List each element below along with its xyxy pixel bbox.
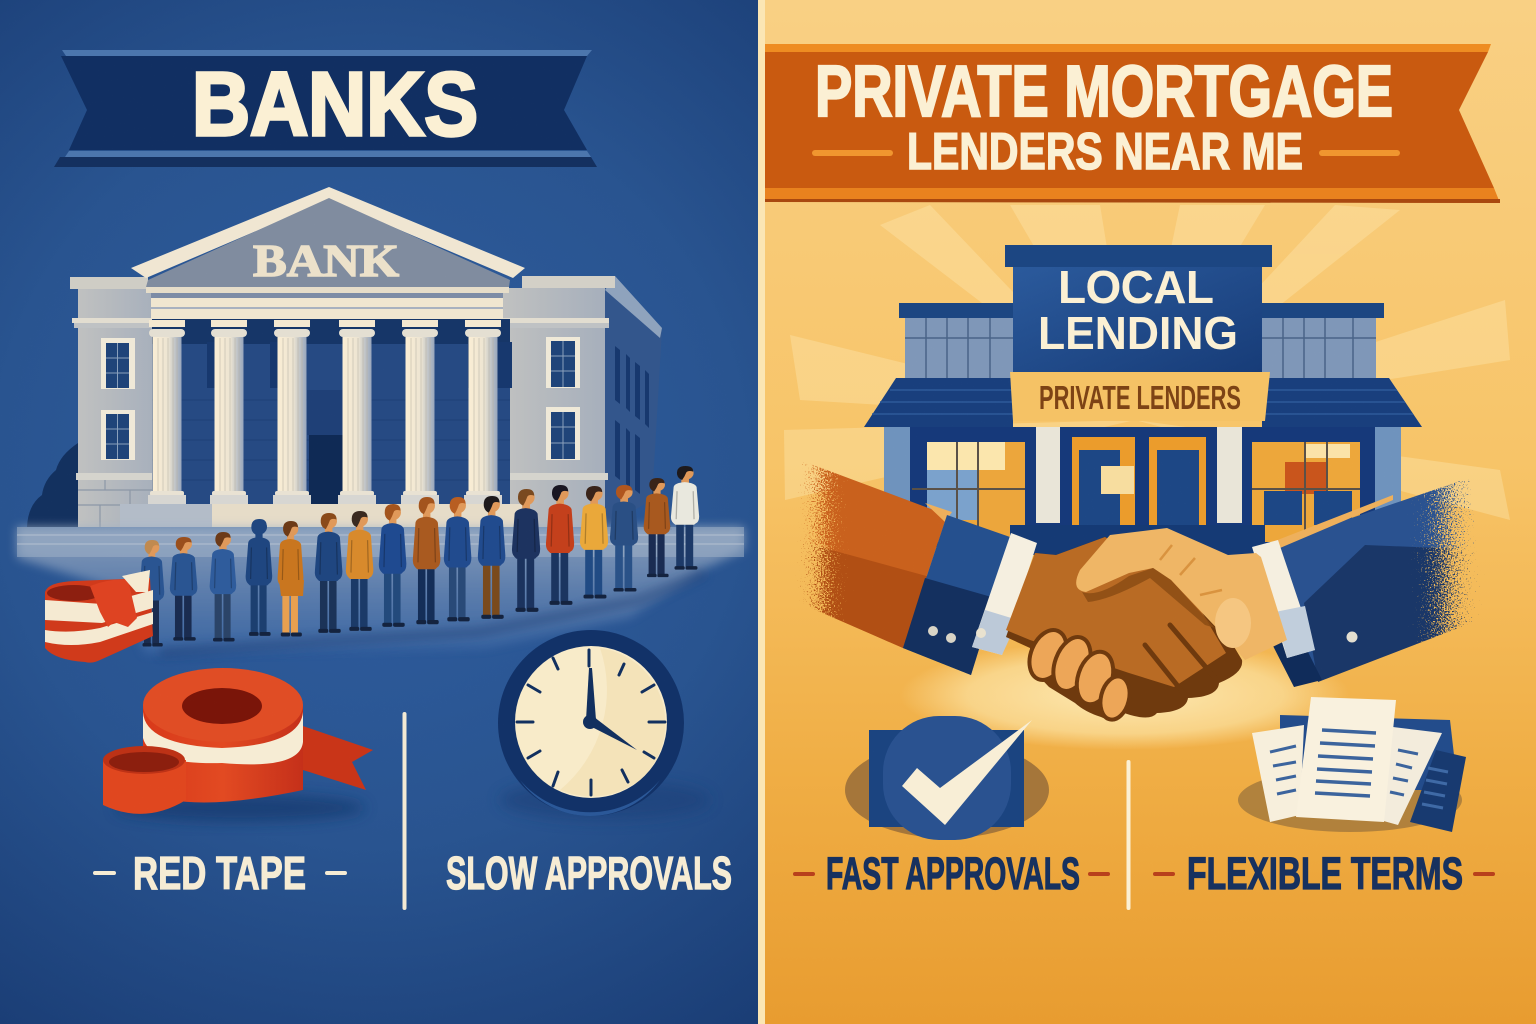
person 5 [278,521,304,636]
left shirt cuff [972,533,1037,655]
person 16 [644,478,670,577]
queue of people [139,466,699,647]
side wall [605,276,662,527]
entablature [151,298,503,319]
left cuff [903,515,1010,675]
lower storefront [884,427,1401,547]
illustration: bank building [27,187,672,530]
pediment label: BANK [253,235,399,286]
center page [1296,697,1396,822]
left wing [78,289,158,527]
illustration: local lending storefront [864,245,1422,555]
person 8 [379,504,406,627]
pediment [131,187,525,278]
tan hand [1076,528,1287,660]
illustration: handshake [793,460,1487,723]
wing windows [101,337,580,460]
sign [1013,267,1262,372]
brown hand [1006,537,1226,687]
label: fast approvals [793,848,1110,899]
person 15 [610,485,638,592]
person 13 [546,485,574,605]
ribbon tail [300,725,373,790]
person 11 [478,496,505,619]
person 7 [346,511,373,631]
roll body [143,705,303,802]
roll hole [182,688,262,724]
panel: banks background [0,0,760,1024]
icon: red tape bundle at queue start [45,570,153,663]
entrance door [309,435,344,505]
check mark [902,720,1032,825]
person 10 [444,497,471,621]
roll top [143,668,303,742]
heading: lenders near me: LENDERS NEAR ME [907,123,1303,181]
banner: private mortgage lenders near me [765,44,1500,203]
left page [1252,725,1304,822]
left sleeve [793,460,947,648]
heading: banks: BANKS [192,55,478,155]
person 14 [580,486,608,598]
sign text: private lenders: PRIVATE LENDERS [1039,379,1241,416]
divider: banks [402,712,406,910]
columns [1036,427,1060,523]
icon: documents [1238,697,1466,832]
columns [148,320,502,504]
panel divider stripe [758,0,765,1024]
left window [912,442,1025,542]
sign text: lending: LENDING [1038,307,1238,359]
label: fast approvals: FAST APPROVALS [826,848,1080,899]
label: slow approvals: SLOW APPROVALS [446,847,732,899]
person 12 [512,489,540,612]
fingers [1022,625,1134,723]
tree silhouette [27,443,78,527]
doors [1072,437,1206,537]
right page [1380,727,1442,825]
right shirt cuff [1252,540,1315,658]
glow under handshake [900,640,1350,750]
icon: check badge [845,716,1049,840]
plaza and steps [17,527,744,653]
label: red tape: RED TAPE [133,847,306,899]
person 3 [210,532,236,642]
person 1 [139,540,164,647]
person 17 [671,466,699,570]
sign plate [1010,372,1270,421]
person 9 [413,497,440,624]
person 4 [246,519,272,636]
upper wings [905,318,1013,378]
planters [1010,525,1265,555]
white band [143,712,303,764]
right window [1252,442,1360,542]
small roll [103,760,186,814]
entrance steps [120,504,522,527]
right sleeve [1278,478,1487,687]
right wing [503,288,605,527]
portico back wall [152,319,510,505]
icon: red tape roll [103,668,373,822]
banner: banks [54,50,597,167]
sun rays behind local lender [784,205,1510,520]
icon: clock [498,630,710,820]
panel: private lenders background [760,0,1536,1024]
divider: lenders [1126,760,1130,910]
person 6 [315,513,342,633]
sign text: local: LOCAL [1058,261,1214,313]
awnings [864,378,1013,427]
brown hand shadow [1006,537,1242,719]
person 2 [170,537,197,641]
